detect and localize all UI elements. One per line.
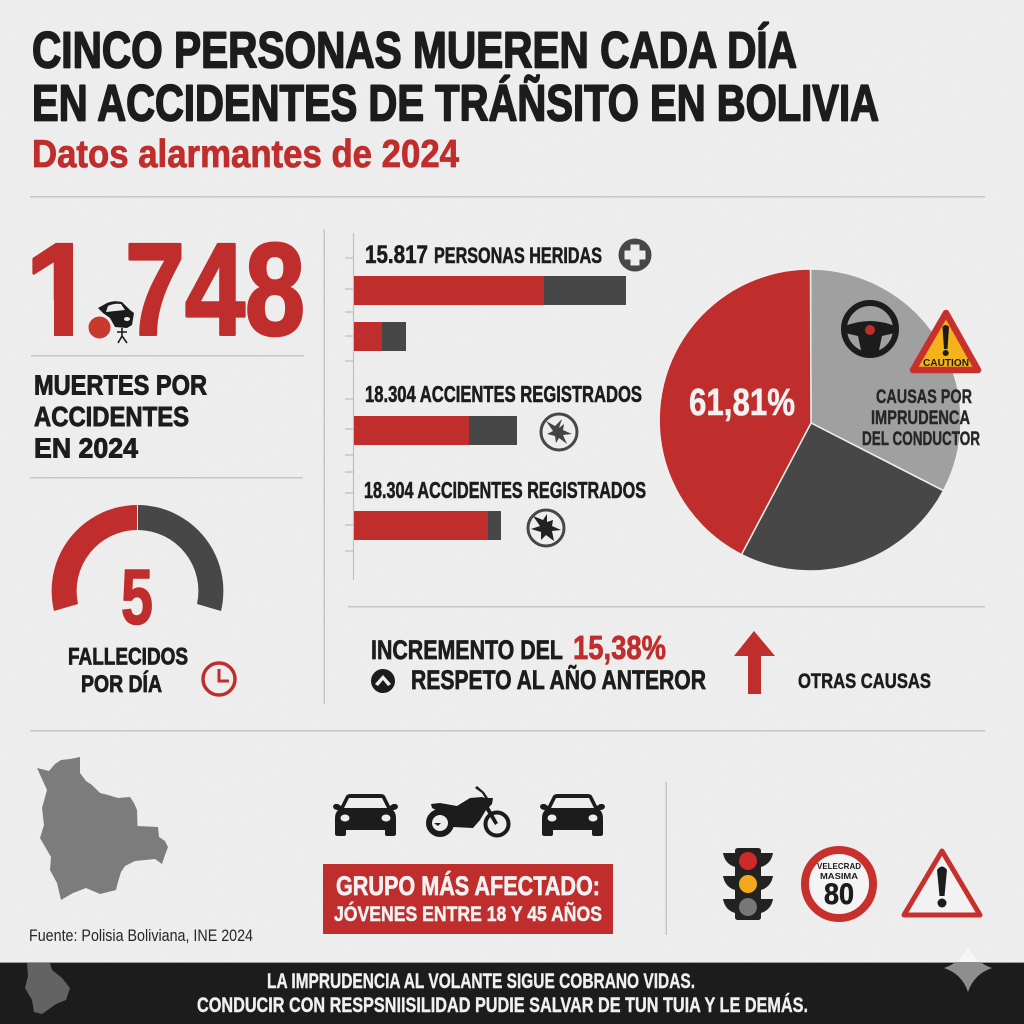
icon: speed limit sign [805, 850, 873, 918]
big number [32, 242, 303, 338]
bar 3 [354, 416, 517, 445]
big number: 1 [25, 216, 97, 362]
bar label: injured: 15.817 [365, 241, 428, 269]
footer text: CONDUCIR CON RESPSNIISILIDAD PUDIE SALVAR DE TUN TUIA Y LE DEMÁS. [197, 994, 808, 1017]
bar 4 [354, 511, 501, 540]
icon: car hitting pedestrian [88, 301, 134, 343]
map of Bolivia [37, 757, 168, 900]
icon: crash repeated [528, 510, 564, 546]
callout: most affected group: JÓVENES ENTRE 18 Y 45 AÑOS [334, 902, 602, 926]
icon: warning triangle [904, 851, 980, 915]
icon: car [333, 794, 398, 836]
footer text: LA IMPRUDENCIA AL VOLANTE SIGUE COBRANO VIDAS. [267, 970, 695, 993]
bar label: injured [365, 241, 602, 269]
bar 2 [354, 322, 406, 351]
icon: speed limit sign: 80 [824, 878, 854, 911]
icon: crash [541, 414, 577, 450]
icon: motorcycle [429, 786, 508, 836]
axis [345, 233, 354, 580]
panel: daily deaths gauge [52, 505, 235, 698]
header [32, 22, 879, 176]
callout: most affected group [323, 864, 613, 934]
increase text [371, 629, 706, 695]
deaths label: EN 2024 [34, 432, 138, 464]
gauge label: POR DÍA [81, 670, 162, 698]
footer text [197, 970, 808, 1017]
icon: speed limit sign: VELECRAD [817, 861, 861, 871]
subtitle: Datos alarmantes de 2024 [32, 133, 459, 176]
icon: clock [203, 663, 235, 695]
gauge value: 5 [121, 552, 153, 640]
gauge label [68, 644, 188, 698]
panel: yearly increase [371, 629, 931, 695]
pie label [862, 387, 980, 450]
increase text: 15,38% [573, 629, 666, 666]
bar label: accidents: 18.304 ACCIENTES REGISTRADOS [365, 381, 642, 407]
pie label: IMPRUDENCA [871, 408, 970, 429]
panel: map and source [29, 757, 253, 945]
pie label: CAUSAS POR [876, 387, 972, 408]
icon: caution sign [913, 313, 978, 370]
increase text: RESPETO AL AÑO ANTEROR [411, 665, 706, 695]
icon: caution sign: CAUTION [923, 357, 969, 369]
pie value: 61,81% [689, 382, 795, 424]
gauge label: FALLECIDOS [68, 644, 188, 670]
source: Fuente: Polisia Boliviana, INE 2024 [29, 927, 253, 945]
icon: speed limit sign: MASIMA [820, 871, 858, 881]
footer band [0, 944, 1024, 1024]
icon: traffic light [723, 848, 773, 920]
deaths label: MUERTES POR [34, 370, 207, 400]
big number: 748 [125, 216, 305, 362]
panel: most affected group [323, 786, 613, 934]
icon: steering wheel [844, 303, 896, 355]
icon: sparkle [944, 944, 992, 992]
panel: bar chart [345, 233, 652, 580]
title [32, 22, 879, 132]
deaths label: ACCIDENTES [34, 401, 189, 432]
icon: footer map [25, 963, 70, 1014]
bar 1 [354, 276, 626, 305]
title: CINCO PERSONAS MUEREN CADA DÍA [32, 22, 797, 78]
icon: road badge [371, 669, 395, 693]
panel: pie chart [659, 269, 980, 571]
pie label: DEL CONDUCTOR [862, 429, 980, 450]
icon: medical cross [618, 238, 652, 272]
bar label: injured: PERSONAS HERIDAS [434, 243, 602, 268]
pie [659, 269, 961, 571]
callout: most affected group: GRUPO MÁS AFECTADO: [336, 870, 600, 901]
increase text: INCREMENTO DEL [371, 635, 563, 665]
panel: deaths [30, 242, 304, 478]
arrow: upward [734, 631, 775, 694]
panel: road signs [723, 848, 980, 920]
other causes label: OTRAS CAUSAS [798, 670, 931, 693]
icon: car [540, 794, 605, 836]
deaths label [34, 370, 207, 464]
bar label: accidents repeated: 18.304 ACCIDENTES REGISTRADOS [364, 477, 646, 503]
gauge [52, 505, 223, 611]
